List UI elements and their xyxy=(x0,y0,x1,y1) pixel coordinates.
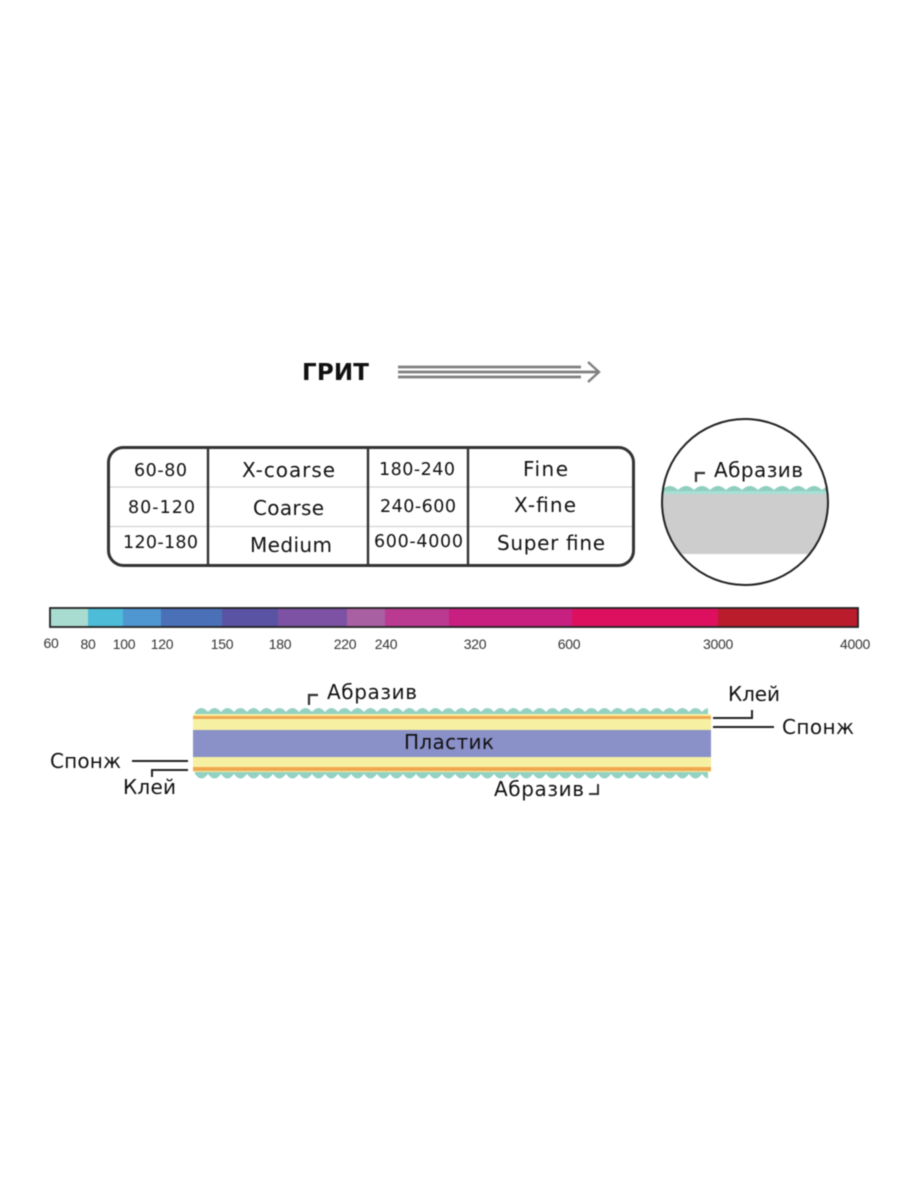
scale tick labels: 60 xyxy=(44,635,59,651)
scale tick labels xyxy=(44,635,870,652)
column: fine names: Fine xyxy=(523,457,568,481)
arrow: grit direction xyxy=(398,362,599,382)
column: grit 60-180 xyxy=(123,461,198,553)
layer: top glue xyxy=(193,716,711,719)
layer: top sponge xyxy=(193,714,711,730)
callout: left sponge: Спонж xyxy=(50,749,121,773)
infographic canvas xyxy=(43,360,870,802)
scale tick labels: 240 xyxy=(375,636,398,652)
layer: bottom abrasive xyxy=(195,772,708,780)
panel: abrasive magnifier circle: Абразив xyxy=(714,458,803,482)
scale tick labels: 4000 xyxy=(840,636,870,652)
scale tick labels: 120 xyxy=(151,636,174,652)
column: grit 180-4000: 240-600 xyxy=(380,497,456,517)
layer: plastic xyxy=(193,730,711,757)
scale tick labels: 100 xyxy=(113,636,136,652)
column: fine names: Super fine xyxy=(497,531,605,555)
callout: left sponge xyxy=(50,749,188,773)
scale tick labels: 220 xyxy=(334,636,357,652)
column: grit 60-180: 120-180 xyxy=(123,533,198,553)
callout: bottom abrasive: Абразив xyxy=(494,777,584,801)
callout: left glue xyxy=(123,770,188,799)
scale tick labels: 3000 xyxy=(703,636,733,652)
diagram: layered cross-section xyxy=(193,707,711,780)
scale tick labels: 80 xyxy=(81,636,96,652)
chart: grit colour scale bar xyxy=(50,608,858,627)
panel: grit table xyxy=(108,447,634,566)
column: grit 180-4000 xyxy=(374,460,463,552)
layer: top abrasive xyxy=(195,707,708,714)
column: grit 180-4000: 180-240 xyxy=(379,460,455,480)
column: coarse names: Medium xyxy=(250,533,332,557)
column: coarse names: Coarse xyxy=(253,496,324,520)
scale tick labels: 180 xyxy=(269,636,292,652)
callout: right sponge: Спонж xyxy=(782,715,854,739)
panel: abrasive magnifier circle xyxy=(660,419,830,585)
column: coarse names: X-coarse xyxy=(242,458,335,482)
callout: left glue: Клей xyxy=(123,775,176,799)
label: plastic: Пластик xyxy=(404,730,494,754)
column: fine names xyxy=(497,457,605,555)
title: ГРИТ: ГРИТ xyxy=(302,360,369,386)
column: grit 60-180: 60-80 xyxy=(134,461,187,481)
scale tick labels: 320 xyxy=(464,636,487,652)
layer: bottom glue xyxy=(193,767,711,771)
layer: bottom sponge xyxy=(193,757,711,772)
scale tick labels: 150 xyxy=(211,636,234,652)
callout: right glue: Клей xyxy=(728,682,780,706)
column: grit 60-180: 80-120 xyxy=(128,498,195,518)
scale tick labels: 600 xyxy=(558,636,581,652)
column: grit 180-4000: 600-4000 xyxy=(374,532,463,552)
column: coarse names xyxy=(242,458,335,557)
column: fine names: X-fine xyxy=(514,493,576,517)
callout: right glue xyxy=(713,682,780,718)
callout: top abrasive: Абразив xyxy=(327,680,417,704)
